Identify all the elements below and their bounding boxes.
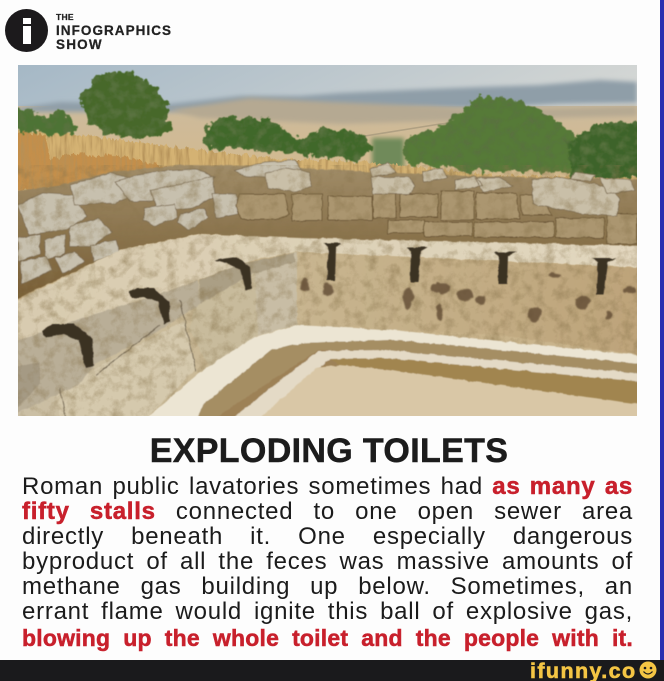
icon: smiley — [640, 662, 656, 678]
back wall stones: warm — [236, 191, 637, 244]
body text block — [22, 473, 633, 652]
body text block: Roman public lavatories sometimes had as many as — [22, 473, 633, 500]
logo wordmark: SHOW — [56, 37, 103, 52]
heading: EXPLODING TOILETS — [150, 432, 508, 470]
sky — [18, 65, 637, 125]
lower marble strip — [230, 350, 645, 420]
step shadow — [144, 325, 645, 420]
body text block: blowing up the whole toilet and the people with it. — [22, 625, 633, 651]
seat slot 3 — [494, 252, 517, 284]
stone band — [196, 340, 645, 420]
shrubs: centre — [203, 117, 372, 161]
back stone wall — [10, 160, 645, 302]
seat slot 6 — [129, 288, 170, 324]
icon: logo circle — [5, 9, 48, 52]
weathered stain texture — [18, 165, 637, 416]
seat slot 2 — [406, 247, 428, 282]
brown kerb — [330, 358, 645, 406]
ledge edge bevels — [10, 280, 200, 416]
seat slot 7 — [42, 324, 94, 368]
marble gutter steps — [144, 325, 645, 420]
body text block: methane gas building up below. Sometimes, an — [22, 573, 633, 600]
plain — [18, 106, 637, 178]
photo: Roman public latrine ruins — [18, 65, 637, 416]
body text block: directly beneath it. One especially dangerous — [22, 523, 633, 550]
capstones: pale — [265, 163, 635, 216]
ground floor — [258, 365, 645, 420]
seat front face — [10, 252, 645, 420]
seat slot 1 — [324, 243, 341, 281]
logo wordmark: THE — [56, 12, 74, 22]
right edge stripe — [660, 0, 664, 660]
watermark bar — [0, 660, 664, 681]
left wall stones: pale — [18, 160, 303, 284]
dry golden grass — [10, 128, 645, 215]
distant mountains — [18, 80, 637, 112]
body text block: fifty stalls connected to one open sewer area — [22, 498, 633, 525]
upper marble strip — [144, 325, 645, 420]
trees and shrubs — [12, 71, 645, 178]
logo wordmark — [56, 12, 172, 52]
body text block: errant flame would ignite this ball of explosive gas, — [22, 598, 633, 625]
body text block: byproduct of all the feces was massive amounts of — [22, 548, 633, 575]
shrubs: far left — [12, 106, 78, 136]
trees: far right — [568, 120, 645, 178]
seat ledge top surface — [10, 234, 645, 348]
dark stains on seat front — [300, 272, 636, 323]
tree: tall left tree — [80, 71, 172, 139]
seat slot 5 — [214, 257, 252, 291]
trees: right olive grove — [403, 96, 577, 174]
keyhole seat openings — [42, 243, 616, 368]
logo: The Infographics Show — [5, 9, 172, 52]
logo wordmark: INFOGRAPHICS — [56, 23, 172, 38]
seat slot 4 — [592, 258, 616, 295]
